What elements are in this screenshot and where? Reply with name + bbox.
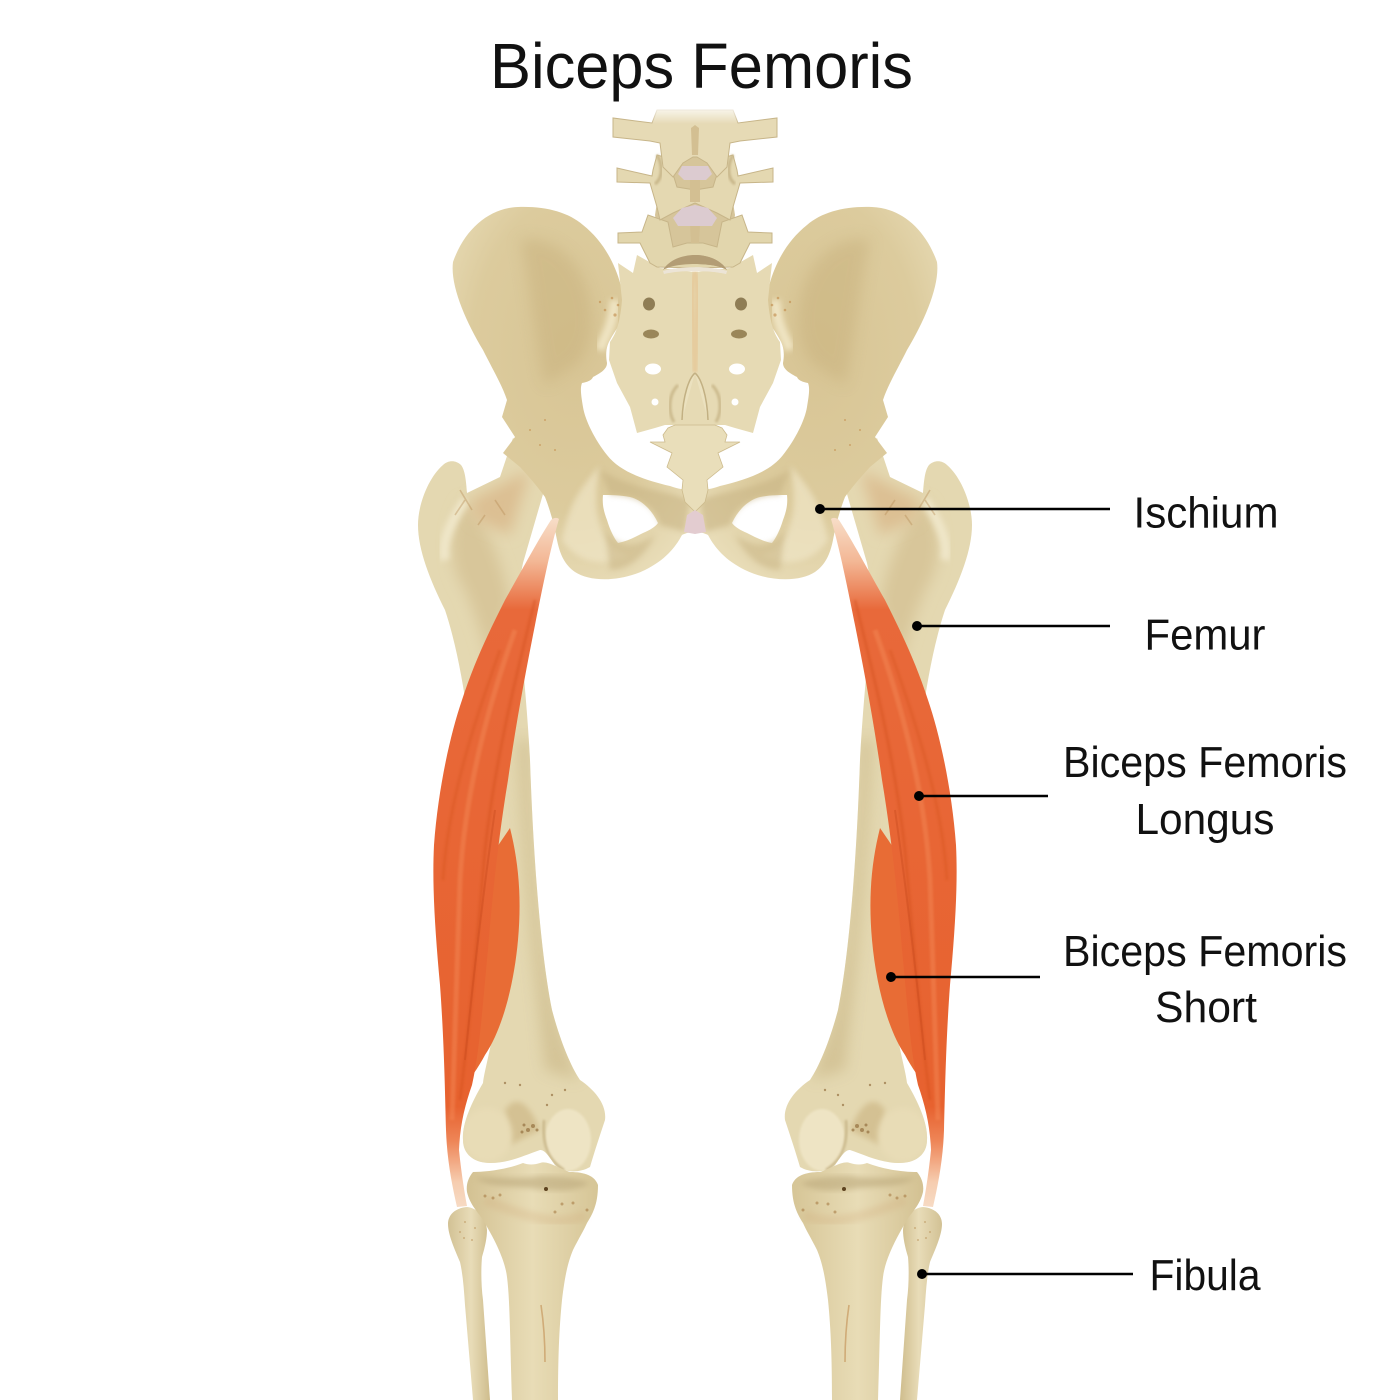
callout: Ischium: Ischium: [1134, 488, 1278, 538]
right leg and pelvis half: [663, 110, 972, 1400]
lumbar vertebra L5 with canal: [663, 215, 772, 274]
left leg and pelvis half (mirror): [418, 110, 727, 1400]
biceps femoris short head: [870, 828, 930, 1090]
lumbar vertebra L4: [695, 155, 773, 226]
greater trochanter shading: [885, 490, 935, 525]
callout: Ischium: [815, 488, 1278, 538]
callout: Femur: Femur: [1144, 610, 1266, 660]
callout: Fibula: [917, 1251, 1261, 1300]
coccyx half: [695, 425, 740, 512]
vertebra top fade: [650, 104, 740, 124]
lumbar vertebra L3: [695, 110, 777, 180]
pubic symphysis: [695, 510, 706, 534]
callout: Biceps Femoris Short: [886, 927, 1347, 1032]
sacrum half with foramina: [695, 255, 781, 433]
skeleton and muscles illustration: [418, 104, 972, 1400]
callout: Biceps Femoris Longus: Biceps Femoris: [1063, 738, 1347, 787]
hip bone: ilium, ischium and pubis: [695, 207, 937, 579]
callout: Femur: [912, 610, 1266, 660]
callout: Fibula: Fibula: [1150, 1251, 1261, 1300]
callout: Biceps Femoris Longus: Longus: [1136, 795, 1274, 844]
title: Biceps Femoris: [490, 30, 913, 102]
callout: Biceps Femoris Short: Short: [1155, 983, 1257, 1032]
tibia: [792, 1162, 923, 1400]
callout: Biceps Femoris Longus: [914, 738, 1347, 844]
biceps femoris long head with tendons: [831, 518, 957, 1207]
callout: Biceps Femoris Short: Biceps Femoris: [1063, 927, 1347, 976]
femur: [785, 438, 972, 1171]
vertebral column backing: [695, 110, 735, 262]
fibula: [900, 1207, 942, 1400]
